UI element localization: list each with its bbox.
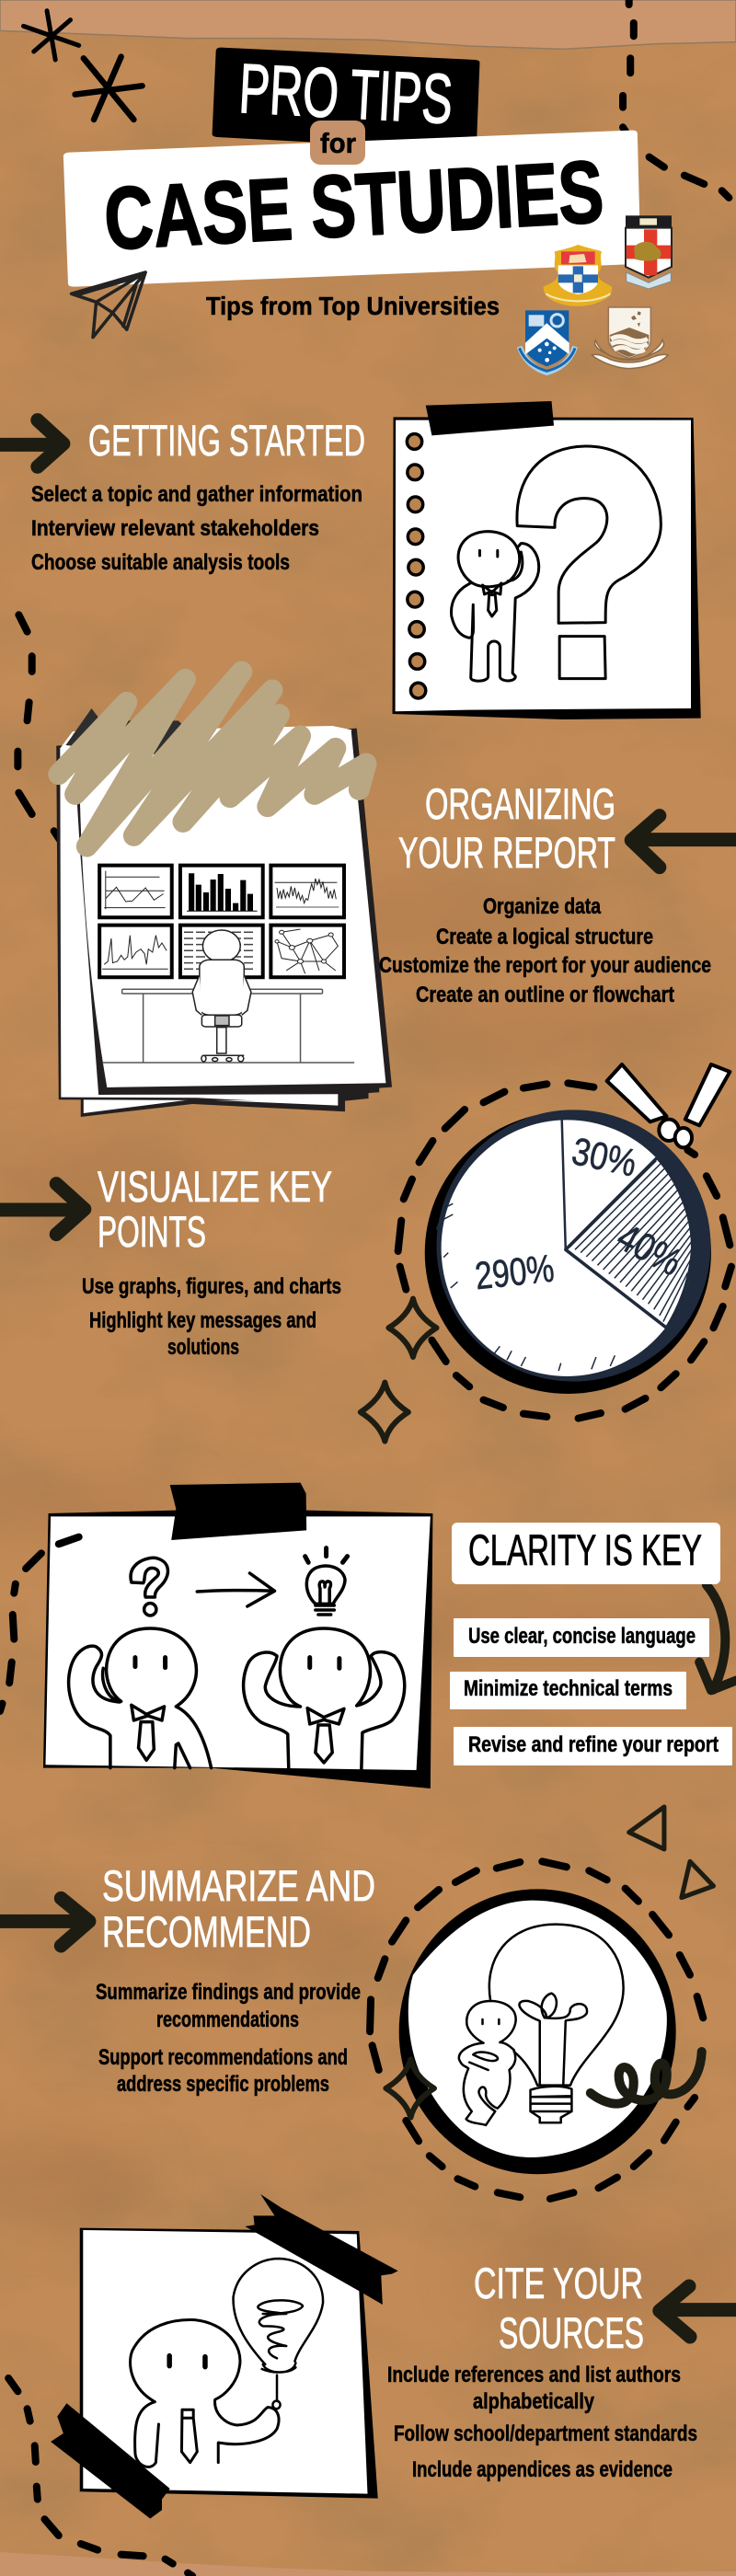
text: summarize list: recommendations bbox=[156, 2007, 299, 2032]
pie labels: 30% bbox=[569, 1129, 640, 1185]
icon: asterisks bbox=[24, 11, 143, 120]
figure bbox=[131, 2320, 279, 2467]
title block: Pro Tips bbox=[213, 48, 479, 151]
text: summarize list: address specific problems bbox=[117, 2072, 329, 2097]
pie chart panel bbox=[361, 1064, 731, 1442]
heading: summarize and recommend bbox=[102, 1861, 375, 1956]
squiggle bbox=[591, 2052, 702, 2104]
sparkle icon bbox=[385, 2059, 434, 2118]
figure bbox=[452, 532, 539, 681]
heading: visualize key points bbox=[98, 1162, 332, 1256]
monitors bbox=[99, 866, 344, 977]
heading: getting started: GETTING STARTED bbox=[88, 416, 365, 465]
text: visualize list bbox=[82, 1274, 341, 1360]
text: visualize list: Use graphs, figures, and charts bbox=[82, 1274, 341, 1299]
text: visualize list: Highlight key messages and bbox=[89, 1308, 316, 1333]
tape: bottom left bbox=[51, 2403, 170, 2519]
back sheets bbox=[81, 1092, 345, 1117]
text: visualize list: solutions bbox=[167, 1335, 239, 1360]
crest: black top, red cross bbox=[626, 215, 672, 289]
icon: triangles bbox=[629, 1807, 714, 1898]
exclamation marks bbox=[607, 1064, 730, 1125]
big bulb bbox=[489, 1925, 624, 2086]
text: cite list bbox=[387, 2363, 697, 2482]
top torn paper band bbox=[0, 0, 736, 49]
binder holes bbox=[407, 434, 426, 698]
bottom torn paper band bbox=[0, 2552, 736, 2576]
tape bbox=[426, 401, 554, 435]
pie chart panel: 290% bbox=[473, 1247, 556, 1297]
text: getting started list: Interview relevant stakeholders bbox=[31, 516, 319, 541]
note paper bbox=[43, 1511, 432, 1788]
heading: summarize and recommend: RECOMMEND bbox=[102, 1907, 311, 1956]
text: getting started list bbox=[31, 482, 362, 575]
leaning figure bbox=[459, 2001, 516, 2125]
heading: visualize key points: POINTS bbox=[98, 1207, 206, 1256]
question mark bbox=[131, 1558, 167, 1616]
text: summarize list: Support recommendations and bbox=[98, 2045, 348, 2070]
chart: list screen bbox=[184, 932, 256, 969]
crest: blue shield bbox=[520, 310, 575, 373]
sparkle icons bbox=[388, 1299, 436, 1357]
light bulb bbox=[305, 1548, 348, 1615]
scribble bbox=[59, 672, 366, 846]
heading: organizing your report: ORGANIZING bbox=[425, 779, 615, 828]
tape: top right bbox=[245, 2194, 398, 2305]
note panel: question to idea bbox=[43, 1483, 432, 1788]
bulb base bbox=[531, 2087, 571, 2122]
white disc bbox=[408, 1901, 667, 2157]
heading: visualize key points: VISUALIZE KEY bbox=[98, 1162, 332, 1211]
arrow: getting started bbox=[0, 420, 63, 466]
note paper bbox=[80, 2228, 378, 2499]
decorative dashed line: left middle bbox=[0, 1553, 41, 1711]
hatched slice bbox=[566, 1157, 693, 1328]
rough edge ticks bbox=[436, 1203, 615, 1371]
heading: organizing your report: YOUR REPORT bbox=[398, 828, 615, 877]
text: organizing list: Organize data bbox=[483, 894, 602, 919]
big question mark bbox=[517, 446, 661, 679]
text: getting started list: Choose suitable analysis tools bbox=[31, 550, 290, 575]
text: organizing list bbox=[379, 894, 711, 1007]
chart: spike series bbox=[102, 936, 168, 969]
decorative dashed line: top right bbox=[623, 0, 729, 198]
tape bbox=[170, 1483, 306, 1540]
heading: cite your sources bbox=[474, 2259, 644, 2357]
heading: organizing your report bbox=[398, 779, 615, 877]
arrow: summarize bbox=[0, 1898, 89, 1946]
tip box: technical terms bbox=[450, 1672, 686, 1709]
title block: Pro Tips: PRO TIPS bbox=[237, 50, 454, 139]
badge: for bbox=[310, 121, 365, 165]
left figure bbox=[69, 1628, 212, 1768]
balloon bulb bbox=[234, 2259, 323, 2409]
dashed ring bbox=[370, 1861, 703, 2199]
seated person bbox=[192, 930, 251, 1062]
text: organizing list: Create an outline or flowchart bbox=[416, 983, 674, 1007]
text: cite list: alphabetically bbox=[473, 2389, 595, 2414]
text: organizing list: Create a logical structure bbox=[436, 925, 653, 949]
decorative dashed line: bottom left bbox=[8, 2378, 192, 2576]
chart: bars bbox=[189, 873, 253, 911]
dashed ring bbox=[398, 1083, 731, 1419]
crest: gold and red bbox=[544, 245, 612, 306]
desk bbox=[102, 994, 354, 1063]
tip box: revise bbox=[454, 1727, 732, 1765]
report stack panel bbox=[56, 672, 392, 1117]
text: summarize list bbox=[96, 1980, 361, 2097]
notebook panel: confused figure bbox=[393, 401, 701, 719]
heading: cite your sources: CITE YOUR bbox=[474, 2259, 643, 2307]
tip box: language bbox=[454, 1618, 709, 1657]
arrow: visualize bbox=[0, 1184, 85, 1235]
circle panel: figure and bulb bbox=[370, 1861, 703, 2199]
chart: line bbox=[104, 871, 166, 909]
pie body bbox=[425, 1111, 711, 1394]
text: getting started list: Select a topic and gather information bbox=[31, 482, 362, 507]
arrow: clarity curved bbox=[699, 1585, 736, 1690]
badge: for: for bbox=[320, 127, 356, 159]
tip box: technical terms: Minimize technical terms bbox=[464, 1676, 673, 1701]
subtitle: Tips from Top Universities bbox=[206, 292, 500, 320]
crest: cream shield with waves bbox=[592, 307, 668, 369]
icon: paper plane bbox=[72, 272, 145, 338]
black disc bbox=[399, 1889, 676, 2174]
chart: network bbox=[275, 929, 338, 973]
right figure bbox=[244, 1628, 405, 1769]
front sheet bbox=[79, 730, 385, 1087]
arrow: cite bbox=[660, 2286, 736, 2337]
heading: summarize and recommend: SUMMARIZE AND bbox=[102, 1861, 375, 1910]
university crests bbox=[520, 215, 672, 373]
note panel: bulb balloon bbox=[51, 2194, 398, 2519]
arrow bbox=[197, 1573, 274, 1606]
arrow: organizing bbox=[631, 816, 736, 868]
text: summarize list: Summarize findings and provide bbox=[96, 1980, 361, 2005]
dark tape under scribble bbox=[65, 708, 216, 770]
chart: noisy series bbox=[274, 879, 337, 903]
pie chart panel: 40% bbox=[610, 1214, 689, 1284]
heading: cite your sources: SOURCES bbox=[499, 2308, 644, 2357]
notebook page bbox=[393, 417, 701, 719]
decorative dashed line: left upper bbox=[17, 615, 61, 842]
